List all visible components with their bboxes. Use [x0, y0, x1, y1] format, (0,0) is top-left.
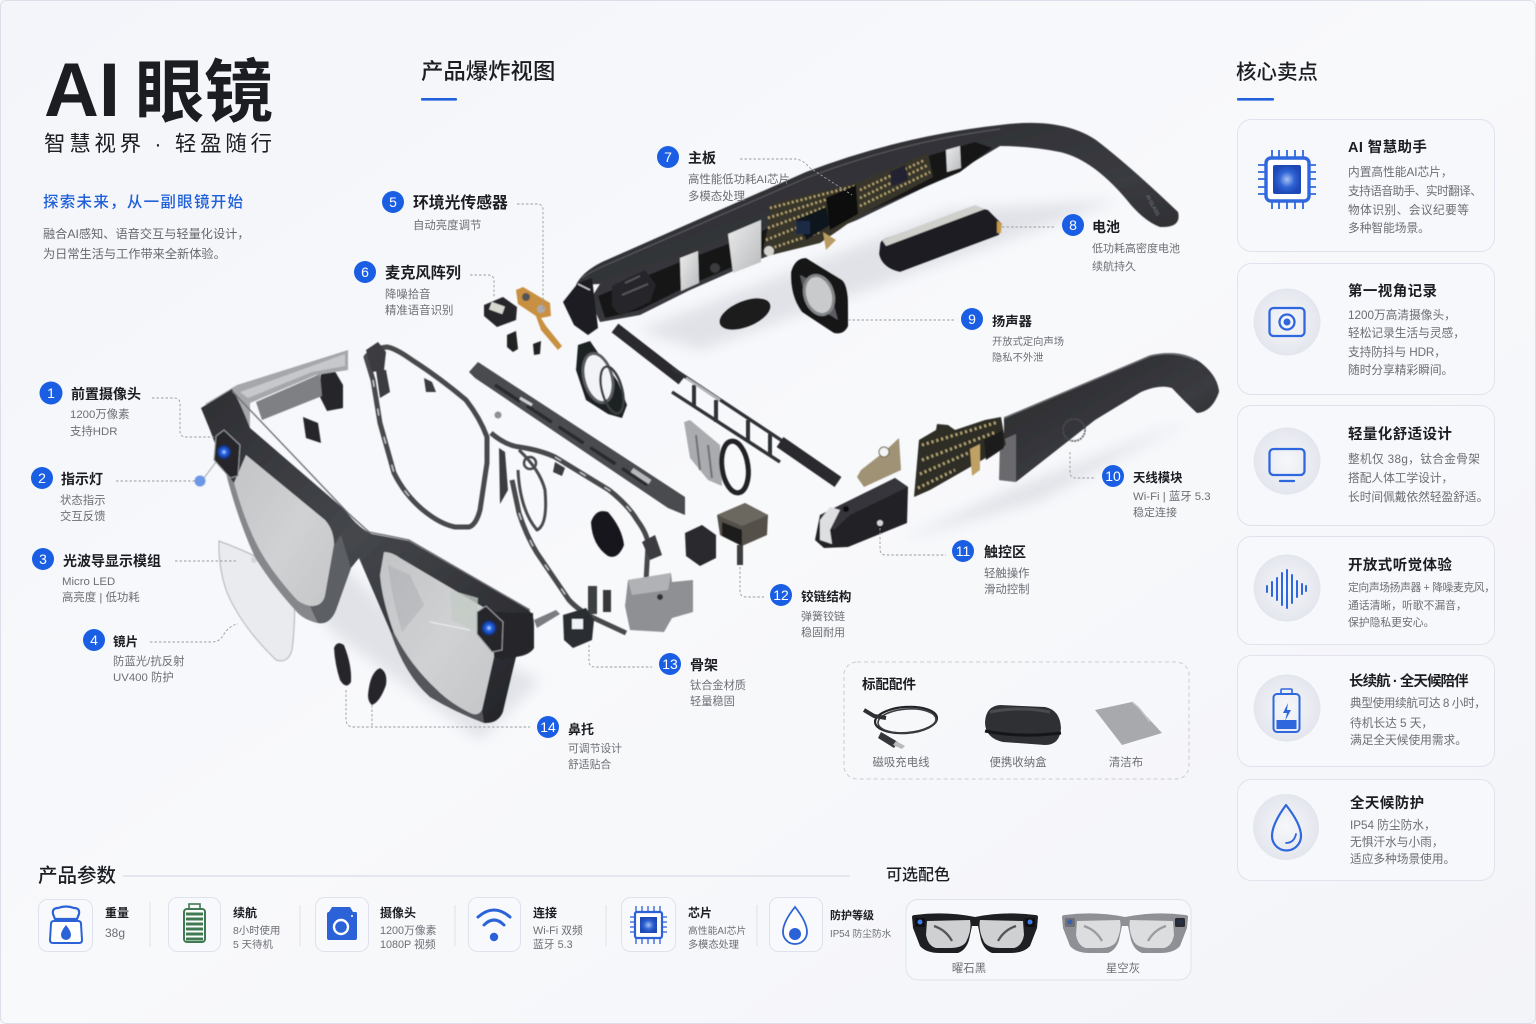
intro body text: 融合AI感知、语音交互与轻量化设计，	[43, 226, 250, 241]
panel: colour options	[906, 900, 1191, 980]
label 9: speaker: 隐私不外泄	[992, 351, 1043, 364]
label 4: lens: 镜片	[113, 634, 138, 649]
parameter: battery	[168, 898, 280, 952]
label 1: front camera: 支持HDR	[70, 424, 117, 438]
icon: camera	[1254, 288, 1320, 356]
parameter: protection	[770, 898, 892, 952]
icon: water drop	[1253, 794, 1319, 860]
panel: standard accessories: 标配配件	[862, 677, 916, 692]
lenses	[234, 455, 334, 606]
label 13: skeleton	[659, 653, 746, 708]
label 9: speaker: 9	[968, 311, 976, 327]
label 12: hinge	[770, 584, 851, 639]
parameter: weight: 重量	[105, 905, 129, 920]
feature card: AI assistant: 物体识别、会议纪要等	[1348, 203, 1469, 217]
label 5: ambient sensor: 自动亮度调节	[413, 218, 481, 232]
parameter: camera: 摄像头	[380, 905, 416, 920]
label 5: ambient sensor: 环境光传感器	[413, 193, 508, 212]
icon: scale	[50, 906, 82, 943]
panel: colour options: 星空灰	[1106, 961, 1140, 975]
hinge bracket with ring	[684, 420, 751, 495]
antenna PCB	[914, 417, 1006, 497]
label 6: mic array	[354, 261, 461, 317]
label 6: mic array: 麦克风阵列	[385, 264, 461, 282]
heading: product parameters: 产品参数	[38, 865, 117, 887]
parameter: chip: 芯片	[688, 905, 712, 920]
heading: exploded view: 产品爆炸视图	[421, 59, 555, 84]
feature card: weather protection: 无惧汗水与小雨，	[1350, 835, 1444, 849]
label 4: lens: 4	[90, 632, 98, 648]
label 14: nose pad	[537, 716, 622, 771]
heading: colour options: 可选配色	[886, 866, 950, 884]
small module	[685, 525, 716, 566]
feature card: AI assistant: 支持语音助手、实时翻译、	[1348, 184, 1482, 198]
icon: chip small	[630, 906, 667, 944]
label 1: front camera: 1200万像素	[70, 408, 130, 421]
panel: standard accessories: 磁吸充电线	[873, 755, 929, 769]
frame brackets	[366, 342, 662, 560]
pill component	[715, 292, 775, 336]
feature card: open audio: 开放式听觉体验	[1348, 556, 1452, 574]
label 1: front camera: 1	[47, 385, 55, 401]
icon: cleaning cloth	[1095, 702, 1162, 745]
parameter: connectivity	[468, 898, 583, 952]
label 3: waveguide	[32, 548, 161, 604]
label 6: mic array: 精准语音识别	[385, 303, 453, 317]
temple stub translucent	[205, 350, 348, 428]
feature card: AI assistant	[1238, 120, 1494, 252]
feature card: comfort: 长时间佩戴依然轻盈舒适。	[1348, 490, 1488, 504]
label 8: battery: 电池	[1092, 219, 1120, 235]
parameter: chip	[622, 898, 746, 952]
label 14: nose pad: 鼻托	[568, 722, 594, 737]
label 10: antenna	[1102, 465, 1211, 519]
label 11: touch: 滑动控制	[984, 582, 1030, 596]
heading: core selling points: 核心卖点	[1236, 61, 1318, 84]
nose bridge inner frame	[366, 347, 648, 633]
icon: chip	[1258, 150, 1316, 209]
label 14: nose pad: 舒适贴合	[568, 757, 611, 771]
label 6: mic array: 6	[361, 264, 369, 280]
label 10: antenna: 稳定连接	[1133, 505, 1177, 519]
label 8: battery: 8	[1069, 217, 1077, 233]
label 10: antenna: Wi-Fi | 蓝牙 5.3	[1133, 490, 1211, 503]
clear lens	[219, 541, 296, 661]
lens rims	[226, 473, 318, 623]
feature card: comfort: 整机仅 38g，钛合金骨架	[1348, 452, 1480, 466]
parameter: protection: 防护等级	[830, 908, 874, 922]
feature card: open audio	[1238, 536, 1495, 644]
icon: monitor	[1254, 428, 1320, 494]
label 2: indicator: 状态指示	[60, 493, 106, 507]
label 13: skeleton: 骨架	[690, 657, 718, 673]
parameter: weight	[38, 900, 129, 952]
rear temple arm with exposed electronics	[563, 123, 1179, 335]
left camera	[214, 430, 240, 478]
exploded glasses illustration	[194, 123, 1219, 740]
title: AI	[44, 48, 120, 133]
label 9: speaker	[961, 308, 1064, 364]
label 12: hinge: 12	[773, 587, 789, 603]
label 3: waveguide: 高亮度 | 低功耗	[62, 590, 140, 604]
hinge grey block	[588, 573, 693, 632]
label 2: indicator: 2	[38, 470, 46, 486]
camera ring	[576, 341, 628, 418]
label 3: waveguide: 光波导显示模组	[63, 553, 161, 569]
label 7: mainboard: 高性能低功耗AI芯片	[688, 172, 790, 186]
parameter: camera	[316, 898, 437, 952]
icon: green battery	[184, 904, 205, 942]
label 7: mainboard: 主板	[688, 150, 716, 166]
parameter: connectivity: Wi-Fi 双频	[533, 923, 583, 937]
label 13: skeleton: 钛合金材质	[690, 678, 746, 692]
label 7: mainboard	[657, 146, 790, 203]
parameter: camera: 1080P 视频	[380, 937, 436, 951]
label 12: hinge: 铰链结构	[801, 589, 851, 604]
label 10: antenna: 天线模块	[1133, 470, 1183, 485]
label 8: battery: 低功耗高密度电池	[1092, 241, 1180, 255]
feature card: first-person recording: 轻松记录生活与灵感，	[1348, 326, 1465, 340]
label 4: lens	[83, 629, 185, 684]
feature card: battery life: 满足全天候使用需求。	[1350, 733, 1467, 747]
heading: core selling points	[1236, 61, 1318, 101]
intro heading: 探索未来，从一副眼镜开始	[43, 192, 243, 211]
intro body text	[43, 226, 250, 261]
feature card: comfort: 搭配人体工学设计，	[1348, 471, 1453, 485]
glasses: obsidian black	[912, 913, 1038, 953]
motor	[612, 270, 656, 316]
intro body text: 为日常生活与工作带来全新体验。	[43, 246, 226, 261]
feature card: comfort	[1238, 406, 1494, 526]
label 2: indicator	[31, 467, 106, 523]
right camera	[477, 606, 503, 652]
feature card: comfort: 轻量化舒适设计	[1348, 425, 1452, 443]
label 13: skeleton: 13	[662, 656, 678, 672]
soft shadows	[240, 200, 1190, 740]
feature card: AI assistant: 多种智能场景。	[1348, 221, 1430, 235]
feature card: battery life: 长续航 · 全天候陪伴	[1349, 672, 1469, 690]
feature card: open audio: 通话清晰，听歌不漏音，	[1348, 598, 1467, 612]
panel: standard accessories: 便携收纳盒	[990, 755, 1047, 769]
frame ladder highlights	[373, 380, 637, 600]
cavity	[598, 142, 992, 318]
front frame	[201, 389, 534, 723]
label 9: speaker: 开放式定向声场	[992, 335, 1064, 348]
leader lines	[116, 159, 1096, 727]
label 7: mainboard: 7	[664, 149, 672, 165]
battery	[879, 205, 1002, 272]
label 3: waveguide: Micro LED	[62, 576, 115, 588]
label 14: nose pad: 14	[540, 719, 556, 735]
parameter: battery: 续航	[233, 905, 257, 920]
panel: standard accessories: 清洁布	[1109, 756, 1143, 769]
end block	[563, 278, 598, 335]
microphone array parts	[484, 297, 541, 355]
feature card: first-person recording: 支持防抖与 HDR，	[1348, 345, 1446, 359]
label 11: touch: 触控区	[984, 544, 1026, 560]
label 9: speaker: 扬声器	[992, 313, 1033, 329]
touch block	[815, 478, 908, 548]
feature card: first-person recording: 第一视角记录	[1348, 282, 1437, 300]
ladder strip	[615, 328, 838, 482]
feature card: AI assistant: AI 智慧助手	[1348, 138, 1427, 156]
icon: charging cable	[864, 705, 938, 749]
gold bracket	[857, 438, 901, 487]
feature card: battery life: 待机长达 5 天，	[1350, 716, 1433, 730]
label 8: battery: 续航持久	[1092, 259, 1136, 273]
feature card: weather protection: 适应多种场景使用。	[1350, 852, 1455, 866]
icon: carrying case	[985, 705, 1061, 745]
silver shields	[728, 220, 761, 273]
feature card: AI assistant: 内置高性能AI芯片，	[1348, 165, 1453, 179]
speaker	[791, 258, 848, 333]
feature card: open audio: 保护隐私更安心。	[1348, 615, 1434, 629]
label 14: nose pad: 可调节设计	[568, 742, 622, 755]
label 13: skeleton: 轻量稳固	[690, 694, 735, 708]
label 6: mic array: 降噪拾音	[385, 287, 431, 301]
parameter: camera: 1200万像素	[380, 924, 437, 937]
feature card: weather protection: 全天候防护	[1350, 794, 1424, 812]
feature card: first-person recording	[1238, 264, 1494, 394]
label 8: battery	[1062, 214, 1180, 273]
small brackets near temple stub	[303, 368, 343, 443]
parameter: chip: 多模态处理	[688, 938, 739, 951]
heading: exploded view	[421, 59, 555, 101]
label 3: waveguide: 3	[39, 551, 47, 567]
icon: filled camera	[327, 907, 357, 940]
label 12: hinge: 稳固耐用	[801, 625, 845, 639]
label 5: ambient sensor: 5	[389, 194, 397, 210]
parameter: weight: 38g	[105, 926, 125, 940]
inner long strip	[469, 362, 685, 515]
temple text: AI GLASS	[1144, 194, 1161, 218]
nose pads	[334, 643, 386, 705]
ambient light sensor flex	[516, 287, 562, 350]
label 11: touch: 11	[956, 543, 970, 559]
icon: sound wave	[1254, 554, 1320, 622]
label 11: touch: 轻触操作	[984, 566, 1030, 580]
feature card: weather protection: IP54 防尘防水，	[1350, 818, 1436, 832]
icon: wifi	[478, 910, 510, 941]
front temple arm	[999, 353, 1219, 482]
icon: battery	[1254, 674, 1320, 742]
label 1: front camera: 前置摄像头	[71, 386, 141, 402]
icon: outline drop	[783, 907, 807, 944]
hinge cube	[717, 503, 768, 565]
waveguide hint	[450, 590, 478, 632]
parameter: connectivity: 连接	[533, 905, 557, 920]
label 10: antenna: 10	[1105, 468, 1121, 484]
label 1: front camera	[40, 382, 141, 438]
parameter: protection: IP54 防尘防水	[830, 927, 892, 940]
panel: standard accessories	[844, 662, 1189, 779]
parameter: chip: 高性能AI芯片	[688, 924, 746, 937]
parameter: connectivity: 蓝牙 5.3	[533, 938, 573, 951]
feature card: first-person recording: 随时分享精彩瞬间。	[1348, 363, 1453, 377]
label 11: touch	[952, 540, 1030, 596]
label 2: indicator: 交互反馈	[60, 509, 106, 523]
feature card: first-person recording: 1200万高清摄像头，	[1348, 308, 1456, 322]
label 4: lens: UV400 防护	[113, 670, 174, 684]
title: 眼镜	[135, 54, 273, 131]
label 5: ambient sensor	[382, 191, 508, 232]
parameter dividers	[150, 902, 757, 947]
feature card: open audio: 定向声场扬声器 + 降噪麦克风，	[1348, 580, 1495, 594]
glasses: stellar grey	[1062, 913, 1188, 953]
feature card: battery life: 典型使用续航可达 8 小时，	[1350, 696, 1486, 710]
label 4: lens: 防蓝光/抗反射	[113, 654, 185, 668]
panel: colour options: 曜石黑	[952, 962, 986, 975]
hinge connector	[534, 608, 594, 648]
parameter: battery: 8小时使用	[233, 924, 280, 937]
dark egg cover	[591, 511, 624, 557]
indicator light	[194, 462, 216, 486]
main PCB	[763, 153, 933, 257]
parameter: battery: 5 天待机	[233, 938, 273, 951]
label 2: indicator: 指示灯	[61, 471, 103, 487]
label 7: mainboard: 多模态处理	[688, 189, 746, 203]
feature card: battery life	[1238, 656, 1494, 766]
title	[44, 48, 273, 133]
label 12: hinge: 弹簧铰链	[801, 609, 845, 623]
feature card: weather protection	[1238, 780, 1494, 880]
subtitle: 智慧视界 · 轻盈随行	[44, 132, 272, 156]
